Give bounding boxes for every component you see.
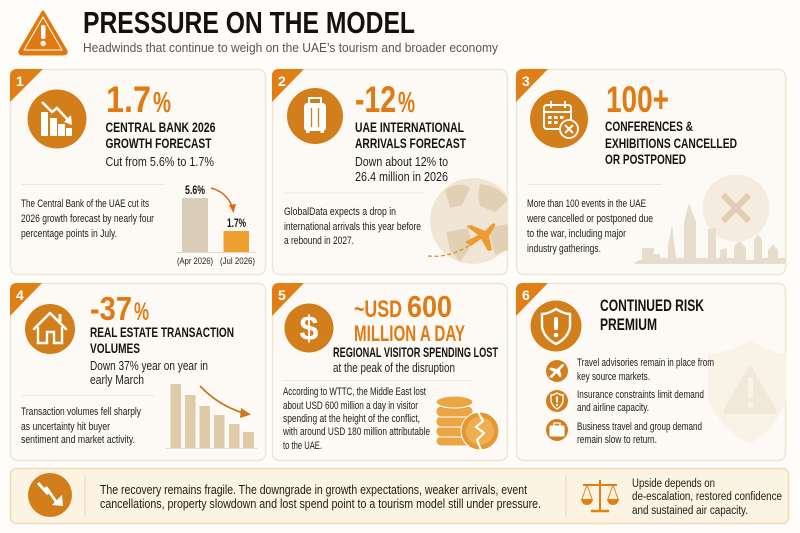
badge: 2 (272, 69, 304, 102)
badge: 1 (10, 69, 43, 102)
item: insurance constraints (546, 389, 704, 414)
body text: about USD 600 million a day in visitor (283, 400, 418, 412)
body text: More than 100 events in the UAE (527, 198, 646, 210)
badge: 4 (10, 283, 42, 316)
stat: USD 600 million a day: ~USD (354, 296, 402, 323)
heading: conferences (605, 118, 737, 167)
heading: arrivals (355, 119, 466, 151)
body text: Transaction volumes fell sharply (21, 406, 141, 418)
subheading: 26.4 million in 2026 (355, 169, 448, 184)
icon: scales (581, 480, 619, 511)
heading: real estate: REAL ESTATE TRANSACTION (90, 324, 234, 340)
body text (284, 206, 421, 247)
panel: 1 central bank forecast (10, 69, 266, 274)
heading: continued risk premium: PREMIUM (600, 316, 657, 334)
panel: 3 events cancelled (516, 69, 786, 274)
subheading: early March (90, 372, 144, 387)
bar chart: falling volumes (165, 384, 258, 448)
bar chart: forecast: (Apr 2026) (177, 256, 213, 267)
item: travel advisories: Travel advisories remain in place from (577, 357, 714, 369)
illustration: globe and plane (428, 178, 516, 264)
stat: 1.7%: 1.7 (106, 79, 151, 120)
subheading: at the peak of the disruption (333, 360, 455, 375)
stat: -12%: -12 (355, 79, 396, 120)
heading: arrivals: UAE INTERNATIONAL (355, 119, 464, 135)
item: business travel: remain slow to return. (577, 434, 657, 446)
body text: as uncertainty hit buyer (21, 421, 110, 433)
badge: 3 (516, 69, 548, 102)
icon: dollar: $ (300, 310, 319, 348)
heading: real estate (90, 324, 234, 356)
stat: USD 600 million a day (354, 289, 465, 346)
body text: The Central Bank of the UAE cut its (21, 198, 149, 210)
body text (526, 198, 653, 255)
panel: 6 risk premium (516, 283, 786, 460)
badge: 2: 2 (278, 73, 286, 89)
heading: conferences: EXHIBITIONS CANCELLED (605, 135, 737, 151)
body text: spending at the height of the conflict, (283, 413, 420, 425)
heading: conferences: OR POSTPONED (605, 151, 686, 167)
badge: 5 (272, 283, 304, 316)
subheading: Cut from 5.6% to 1.7% (106, 154, 214, 169)
stat: 1.7%: % (153, 87, 171, 119)
heading: continued risk premium: CONTINUED RISK (600, 297, 704, 315)
stat: -12%: % (398, 87, 415, 119)
heading: central bank (106, 119, 216, 151)
item: travel advisories (546, 357, 714, 383)
body text (21, 406, 141, 446)
subtitle: Headwinds that continue to weigh on the UAE’s tourism and broader economy (83, 40, 498, 55)
illustration: skyline with cross (635, 174, 786, 264)
badge: 6: 6 (522, 287, 530, 303)
stat: -37%: -37 (90, 290, 132, 327)
body text: to the war, including major (527, 228, 626, 240)
body text: were cancelled or postponed due (526, 213, 653, 225)
bar chart: forecast (176, 185, 256, 267)
subheading (90, 358, 208, 387)
bar chart: forecast: 5.6% (185, 185, 205, 197)
panel: 4 real estate (10, 283, 266, 460)
heading: arrivals: ARRIVALS FORECAST (355, 135, 466, 151)
heading: real estate: VOLUMES (90, 340, 140, 356)
text: recovery remains fragile (100, 483, 541, 511)
icon: shield (530, 300, 582, 352)
badge: 6 (516, 283, 548, 316)
body text: industry gatherings. (527, 243, 601, 255)
heading: visitor spending: REGIONAL VISITOR SPENDING LOST (333, 344, 498, 360)
item: business travel: Business travel and group demand (577, 421, 702, 433)
icon: dollar (284, 304, 334, 352)
icon: house (25, 304, 75, 354)
body text: a rebound in 2027. (284, 235, 354, 247)
body text: According to WTTC, the Middle East lost (283, 386, 426, 398)
item: travel advisories: key source markets. (577, 371, 650, 383)
heading: continued risk premium (600, 297, 704, 334)
body text (21, 198, 154, 240)
subheading: Down about 12% to (355, 154, 448, 169)
bar chart: forecast: 1.7% (227, 218, 246, 230)
text: upside depends: and sustained air capacity. (632, 505, 748, 517)
item: insurance constraints: Insurance constraints limit demand (577, 389, 704, 401)
body text: percentage points in July. (21, 228, 117, 240)
body text: international arrivals this year before (284, 221, 421, 233)
subheading: Down 37% year on year in (90, 358, 208, 373)
panel: 2 arrivals forecast (272, 69, 516, 274)
text: recovery remains fragile: The recovery remains fragile. The downgrade in growth expectations, weaker arrivals, event (100, 483, 527, 497)
heading: central bank: CENTRAL BANK 2026 (106, 119, 216, 135)
stat: -37%: % (134, 298, 149, 326)
body text: GlobalData expects a drop in (284, 206, 396, 218)
bar chart: forecast: (Jul 2026) (220, 256, 255, 267)
text: upside depends (632, 478, 782, 517)
icon: suitcase (287, 88, 343, 144)
icon: falling bar chart (28, 90, 86, 148)
text: recovery remains fragile: cancellations, property slowdown and lost spend point to a tourism model still under pressure. (100, 497, 541, 511)
illustration: coins and broken coin (436, 396, 499, 450)
body text: to the UAE. (283, 440, 322, 452)
stat: USD 600 million a day: 600 (407, 289, 452, 324)
heading: central bank: GROWTH FORECAST (106, 135, 212, 151)
badge: 4: 4 (16, 287, 24, 303)
panel: 5 visitor spending (272, 283, 508, 460)
panel: bottom takeaway (10, 468, 788, 524)
stat: 100+: 100+ (606, 79, 669, 120)
icon: warning triangle (20, 12, 66, 54)
heading: conferences: CONFERENCES & (605, 118, 693, 134)
item: insurance constraints: and airline capacity. (577, 402, 649, 414)
title: PRESSURE ON THE MODEL (83, 6, 415, 40)
body text: 2026 growth forecast by nearly four (21, 213, 154, 225)
text: upside depends: Upside depends on (632, 478, 715, 490)
body text: with around USD 180 million attributable (282, 426, 430, 438)
body text (282, 386, 430, 452)
badge: 5: 5 (278, 287, 286, 303)
body text: sentiment and market activity. (21, 434, 135, 446)
badge: 1: 1 (16, 73, 24, 89)
stat: USD 600 million a day: MILLION A DAY (354, 321, 465, 346)
icon: calendar with x (530, 90, 588, 148)
icon: downward trend (28, 473, 72, 517)
subheading (355, 154, 448, 184)
illustration: shield watermark (708, 340, 786, 444)
badge: 3: 3 (522, 73, 530, 89)
item: business travel (546, 419, 702, 446)
